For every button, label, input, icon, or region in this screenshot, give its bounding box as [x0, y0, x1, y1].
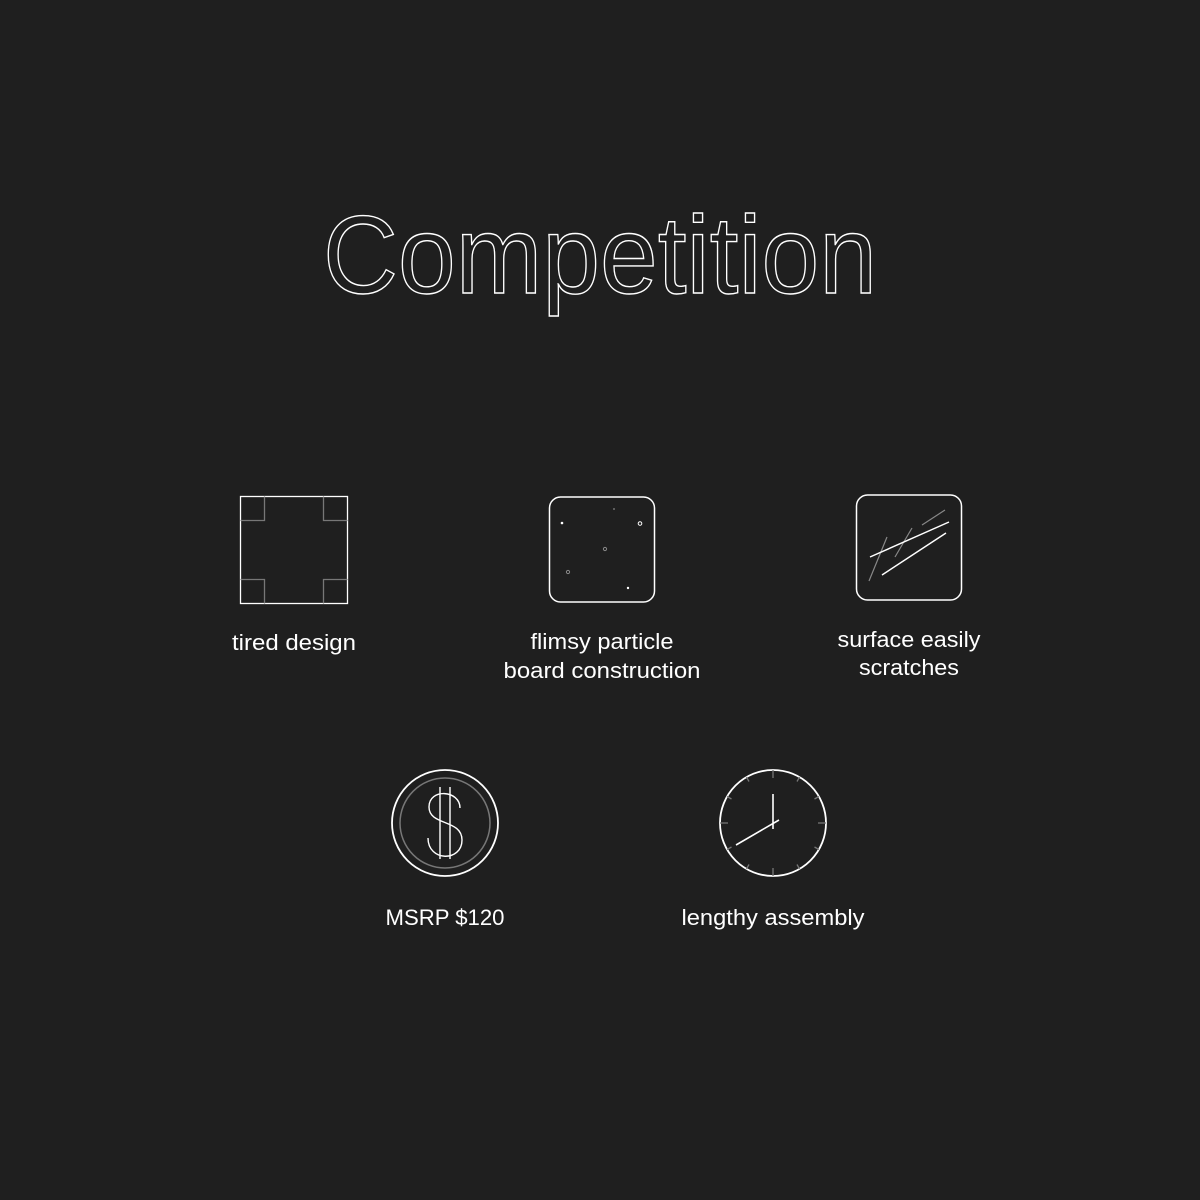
- item: lengthy assembly: [682, 770, 864, 930]
- item: MSRP: [386, 770, 504, 930]
- icon: clock: [720, 770, 826, 876]
- icon: square with corners: [240, 496, 348, 604]
- label: surface easily scratches: surface easily: [838, 627, 980, 652]
- label: flimsy particle board construction: board construction: [504, 658, 700, 683]
- icon: coin: [392, 770, 498, 876]
- item: scratches: [838, 495, 980, 680]
- icon: board with particles: [550, 497, 654, 602]
- label: MSRP $120: MSRP $120: [386, 905, 504, 930]
- title: Competition: [323, 194, 877, 317]
- item: particle board: [504, 497, 700, 683]
- label: surface easily scratches: scratches: [859, 655, 959, 680]
- label: flimsy particle board construction: flimsy particle: [530, 629, 674, 654]
- icon: scratched surface: [856, 495, 962, 600]
- label: lengthy assembly: lengthy assembly: [682, 905, 864, 930]
- item: tired design: [232, 496, 356, 655]
- label: tired design: tired design: [232, 630, 356, 655]
